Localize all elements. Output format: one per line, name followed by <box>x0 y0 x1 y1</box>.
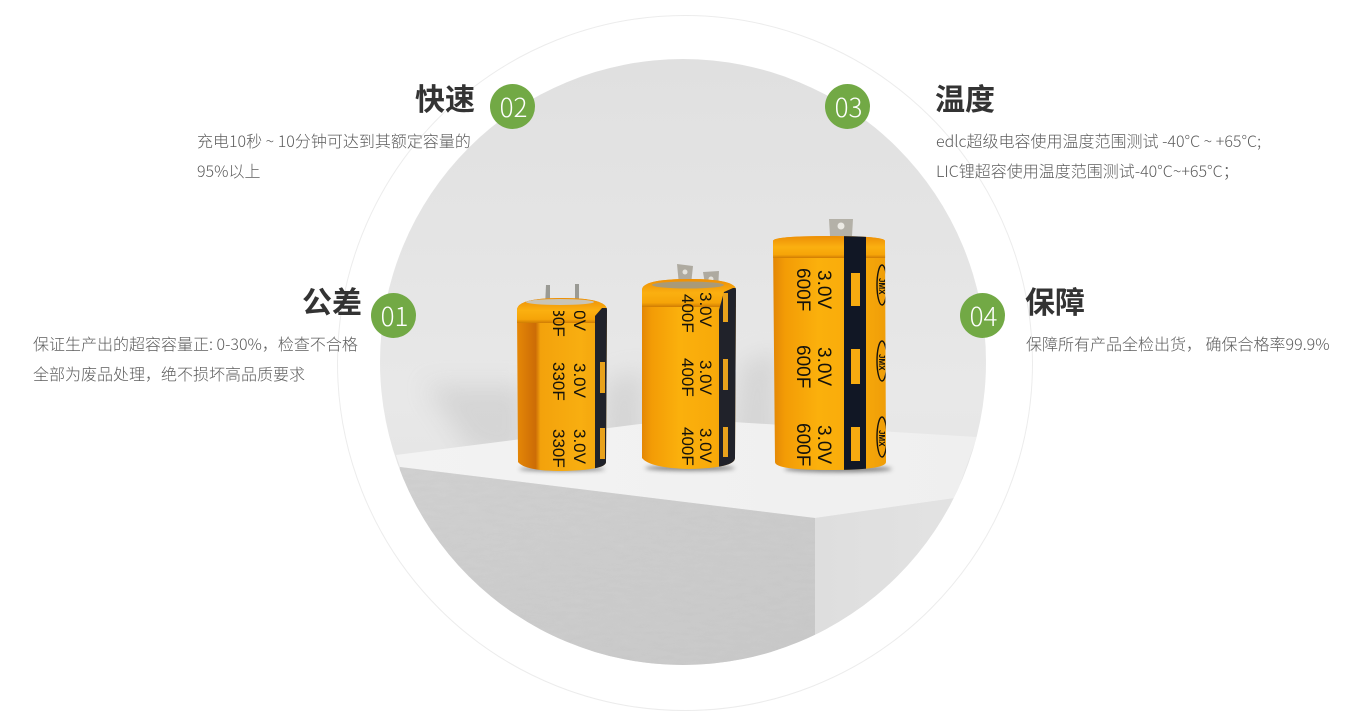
badge 02: 02 <box>500 88 527 125</box>
capacitor 600F: 600F <box>792 423 813 466</box>
capacitor 600F: 600F <box>792 268 813 311</box>
capacitor 330F: 330F <box>549 362 568 401</box>
platform top face <box>396 420 977 518</box>
text: speed description: 95%以上 <box>197 158 260 182</box>
heading: 温度: 温度 <box>935 75 995 119</box>
platform front face <box>400 467 815 665</box>
text: temperature description <box>936 128 1261 182</box>
capacitor shadows <box>519 465 892 472</box>
capacitor 400F: 3.0V <box>696 360 715 396</box>
capacitor 330F: 330F <box>549 429 568 468</box>
capacitor 330F: 330F <box>549 298 568 337</box>
text: temperature description: LIC锂超容使用温度范围测试-40°C~+65°C； <box>936 158 1239 182</box>
capacitor 400F: 3.0V <box>696 428 715 464</box>
text: tolerance description <box>33 331 358 385</box>
badge 03: 03 <box>835 88 862 125</box>
capacitor 600F: 3.0V <box>813 270 834 309</box>
badge 03 <box>825 84 870 129</box>
text: tolerance description: 保证生产出的超容容量正: 0-30%，检查不合格 <box>33 331 358 355</box>
capacitor 330F: 3.0V <box>570 296 589 332</box>
text: speed description <box>197 128 471 182</box>
platform side face <box>822 590 882 631</box>
text: guarantee description: 保障所有产品全检出货， 确保合格率99.9% <box>1026 331 1330 355</box>
badge 01: 01 <box>381 297 408 334</box>
capacitor 330F: 3.0V <box>570 429 589 465</box>
capacitor 600F: 600F <box>792 345 813 388</box>
capacitor 400F: 400F <box>678 358 697 397</box>
capacitor 600F <box>771 219 889 472</box>
outer ring <box>338 16 1032 710</box>
capacitor 330F <box>515 284 609 474</box>
heading: 公差: 公差 <box>302 278 362 322</box>
heading: 保障: 保障 <box>1025 278 1085 322</box>
capacitor 600F: JMX <box>877 430 886 447</box>
badge 04 <box>960 293 1005 338</box>
badge 01 <box>371 293 416 338</box>
backdrop circle with white platform <box>380 59 1000 685</box>
text: tolerance description: 全部为废品处理，绝不损坏高品质要求 <box>33 361 305 385</box>
capacitor 400F: 400F <box>678 294 697 333</box>
capacitor 600F: 3.0V <box>813 347 834 386</box>
product photo illustration <box>337 15 1033 711</box>
badge 04: 04 <box>970 297 997 334</box>
wall shadows <box>435 356 774 446</box>
capacitor 600F: 3.0V <box>813 425 834 464</box>
capacitor 330F: 3.0V <box>570 363 589 399</box>
text: speed description: 充电10秒 ~ 10分钟可达到其额定容量的 <box>197 128 471 152</box>
text: temperature description: edlc超级电容使用温度范围测试 -40°C ~ +65°C; <box>936 128 1261 152</box>
heading: 快速: 快速 <box>415 75 475 119</box>
capacitor 600F: JMX <box>877 278 886 295</box>
capacitor 600F: JMX <box>877 354 886 371</box>
capacitor 400F: 400F <box>678 427 697 466</box>
capacitor 400F: 3.0V <box>696 292 715 328</box>
badge 02 <box>490 84 535 129</box>
capacitor 400F <box>640 264 738 471</box>
